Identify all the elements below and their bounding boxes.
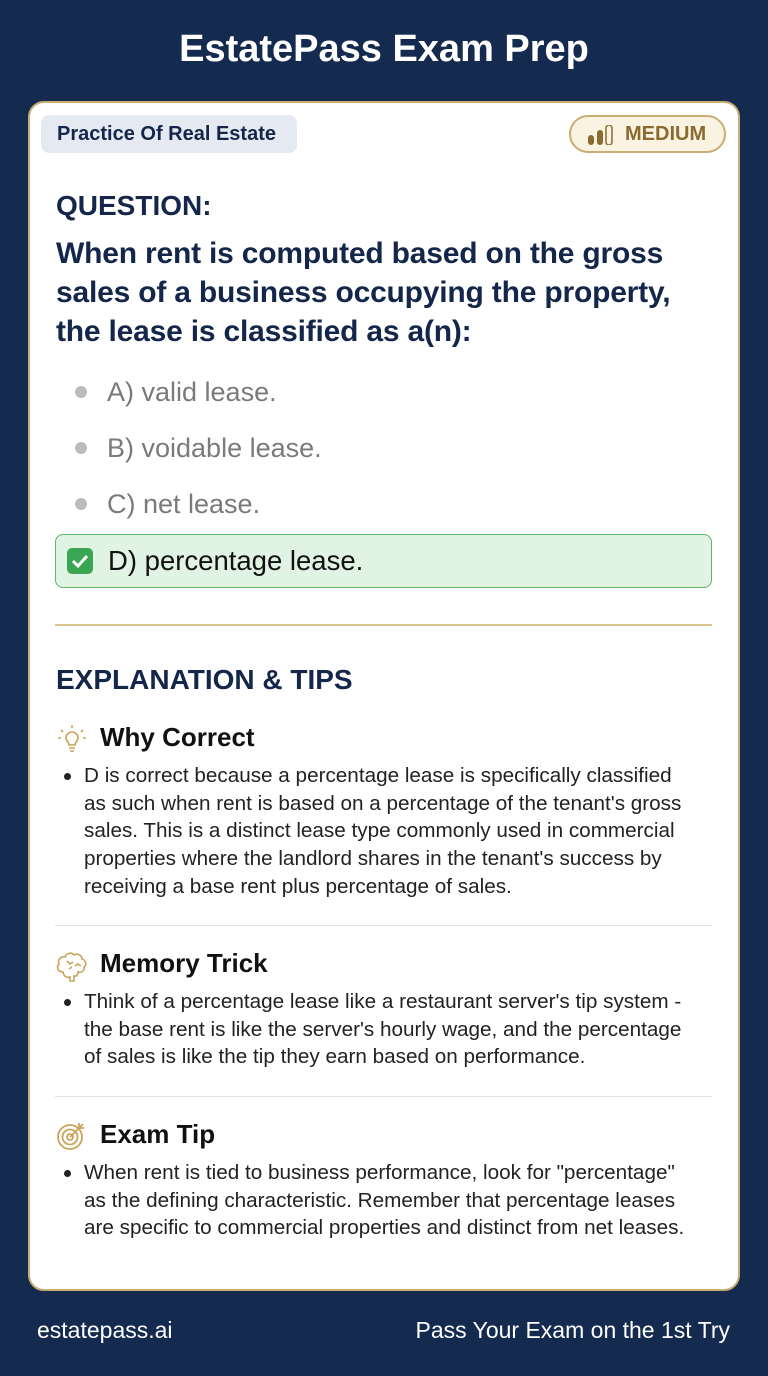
explanation heading: EXPLANATION & TIPS [56,664,353,695]
section: why correct: sales. This is a distinct lease type commonly used in commercial [84,819,675,842]
section: exam tip [57,1119,684,1239]
footer: website: estatepass.ai [37,1317,173,1343]
section: why correct: receiving a base rent plus percentage of sales. [84,875,512,898]
title: EstatePass Exam Prep [179,28,589,70]
question text: sales of a business occupying the property, [56,276,670,309]
section: why correct: properties where the landlord shares in the tenant's success by [84,847,662,870]
difficulty badge [569,115,726,153]
difficulty badge: MEDIUM [625,123,706,145]
correct option D [55,534,712,588]
section: memory trick: Think of a percentage lease like a restaurant server's tip system - [84,990,681,1013]
section: memory trick: the base rent is like the server's hourly wage, and the percentage [84,1018,681,1041]
option B: B) voidable lease. [107,433,322,463]
correct option D: D) percentage lease. [108,545,363,576]
question heading: QUESTION: [56,190,212,221]
section: memory trick: Memory Trick [100,948,268,978]
section: why correct: Why Correct [100,722,255,752]
section: exam tip: When rent is tied to business performance, look for "percentage" [84,1161,675,1184]
question text: the lease is classified as a(n): [56,315,471,348]
footer: tagline: Pass Your Exam on the 1st Try [416,1317,730,1343]
section: why correct: D is correct because a percentage lease is specifically classified [84,764,672,787]
icon: target [57,1123,84,1150]
section: exam tip: as the defining characteristic. Remember that percentage leases [84,1189,675,1212]
section: exam tip: are specific to commercial properties and distinct from net leases. [84,1216,684,1239]
option A: A) valid lease. [107,377,277,407]
section: why correct [58,722,681,898]
question text [56,237,670,348]
question text: When rent is computed based on the gross [56,237,663,270]
section: memory trick [56,948,681,1068]
category tag [41,115,297,153]
section: memory trick: of sales is like the tip they earn based on performance. [84,1045,585,1068]
option C: C) net lease. [107,489,260,519]
icon: lightbulb [58,725,86,752]
icon: brain [56,952,87,982]
section: why correct: as such when rent is based on a percentage of the tenant's gross [84,792,681,815]
category tag: Practice Of Real Estate [57,123,276,145]
section: exam tip: Exam Tip [100,1119,215,1149]
